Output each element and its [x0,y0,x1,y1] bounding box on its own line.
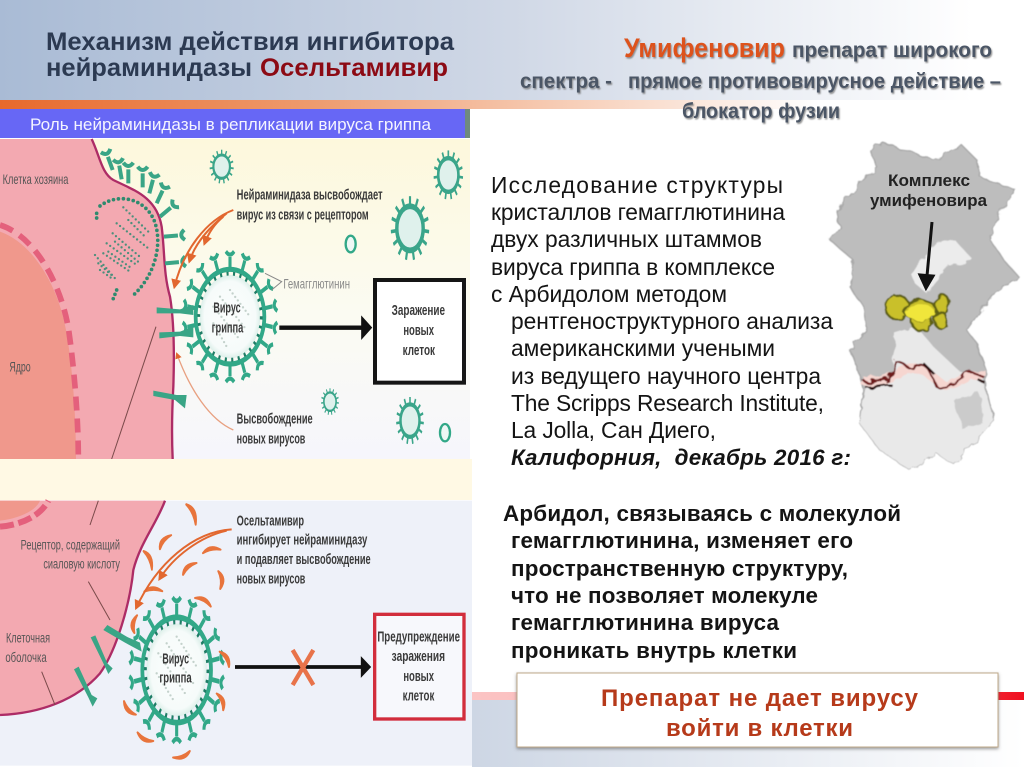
title: left: нейраминидазы [46,54,252,82]
labels: Клетка хозяина [3,171,68,187]
orange arrows [174,210,233,430]
title: right: Умифеновир [624,33,785,63]
labels: вирус из связи с рецептором [237,207,369,223]
virus inner dots [157,637,197,700]
box: infection: новых [403,323,434,339]
text block: mechanism: Арбидол, связываясь с молекулой [503,501,901,526]
hemagglutinin bracket [265,273,282,290]
pale strip [0,459,472,500]
text block: study: кристаллов гемагглютинина [491,199,785,225]
title: right [520,33,1001,123]
panel: oseltamivir action [0,501,472,766]
text block: mechanism: гемагглютинина вируса [511,610,780,635]
labels: ингибирует нейраминидазу [237,533,367,549]
title: right: прямое противовирусное действие – [628,70,1001,93]
title: right: спектра - [520,70,612,93]
box: prevention: Предупреждение [377,630,460,646]
box: infection: Заражение [392,303,445,319]
box: prevention: клеток [403,689,435,705]
title: left: Осельтамивир [260,54,448,82]
text block: mechanism [503,501,901,663]
title: left: Механизм действия ингибитора [46,28,455,56]
text block: study: двух различных штаммов [491,226,762,252]
subheading bar [0,109,470,138]
text block: mechanism: пространственную структуру, [511,556,848,581]
orange crescents [124,504,229,761]
callout: Препарат не дает вирусу [601,685,919,712]
labels: Высвобождение [237,411,313,427]
blocked arrow [235,661,369,673]
label: virus [159,651,192,687]
label: complex: Комплекс [888,172,970,190]
label: virus [212,301,244,337]
label: virus: Вирус [162,651,189,667]
labels: новых вирусов [237,431,305,447]
cell membrane [92,139,174,459]
protein structure [830,143,1018,470]
receptors [153,305,193,408]
labels: Рецептор, содержащий [21,536,120,552]
labels: Нейраминидаза высвобождает [237,187,383,203]
labels [3,171,383,447]
membrane spikes [101,149,186,268]
text block: study: The Scripps Research Institute, [511,390,824,416]
title: right: блокатор фузии [682,100,840,123]
virus inner dots [213,290,250,347]
black arrow [279,321,369,334]
text block: mechanism: гемагглютинина, изменяет его [511,528,853,553]
nucleus [0,232,76,459]
host cell [0,139,174,459]
text block: study: с Арбидолом методом [491,281,727,307]
orange arrows [136,529,232,608]
box: prevention [375,614,464,719]
callout: войти в клетки [666,715,853,742]
label: virus: Вирус [213,301,241,317]
vesicle dots [100,199,158,297]
box: infection: клеток [403,343,436,359]
small viruses [210,150,463,444]
title: right: препарат широкого [792,39,992,62]
labels: новых вирусов [237,571,305,587]
nuclear envelope [0,225,78,459]
labels: и подавляет высвобождение [237,552,371,568]
labels: Клеточная [6,630,50,646]
receptors [74,625,142,707]
box: infection [375,280,464,383]
labels: сиаловую кислоту [43,556,120,572]
host cell [0,501,165,715]
ligand [885,295,950,331]
subheading bar: Роль нейраминидазы в репликации вируса гриппа [30,116,432,134]
bottom gradient [472,700,1024,767]
box: prevention: заражения [392,649,445,665]
label: virus: гриппа [159,671,192,687]
text block: study: рентгеноструктурного анализа [511,308,833,334]
bottom stripe [472,692,1024,700]
labels: оболочка [5,649,47,665]
text block: study: Исследование структуры [491,172,783,198]
leader line [112,327,156,459]
callout [517,673,998,747]
text block: study: La Jolla, Сан Диего, [511,417,716,443]
text block: study: Калифорния, декабрь 2016 г: [511,445,851,470]
main virus [183,251,277,382]
label: complex [870,172,988,210]
leader lines [42,501,110,705]
text block: study: вируса гриппа в комплексе [491,254,775,280]
labels: Ядро [9,359,31,375]
labels [5,513,371,665]
panel: neuraminidase role [0,139,470,459]
text block: mechanism: проникать внутрь клетки [511,638,797,663]
nuclear envelope [0,501,48,527]
text block: study [491,172,851,470]
label: complex: умифеновира [870,192,988,210]
text block: study: из ведущего научного центра [511,363,821,389]
labels: Гемагглютинин [283,276,350,292]
text block: mechanism: что не позволяет молекуле [511,583,818,608]
label: virus: гриппа [212,321,244,337]
budding genome [95,207,148,278]
text block: study: американскими учеными [511,335,775,361]
title: left [46,28,455,82]
arrow: complex pointer [920,222,933,288]
box: prevention: новых [403,669,434,685]
polypeptide chain [862,362,986,388]
cell membrane [0,501,165,715]
header band [0,0,1024,101]
orange cross [293,650,313,685]
orange divider [0,100,1024,109]
labels: Осельтамивир [237,513,304,529]
main virus [129,597,224,743]
